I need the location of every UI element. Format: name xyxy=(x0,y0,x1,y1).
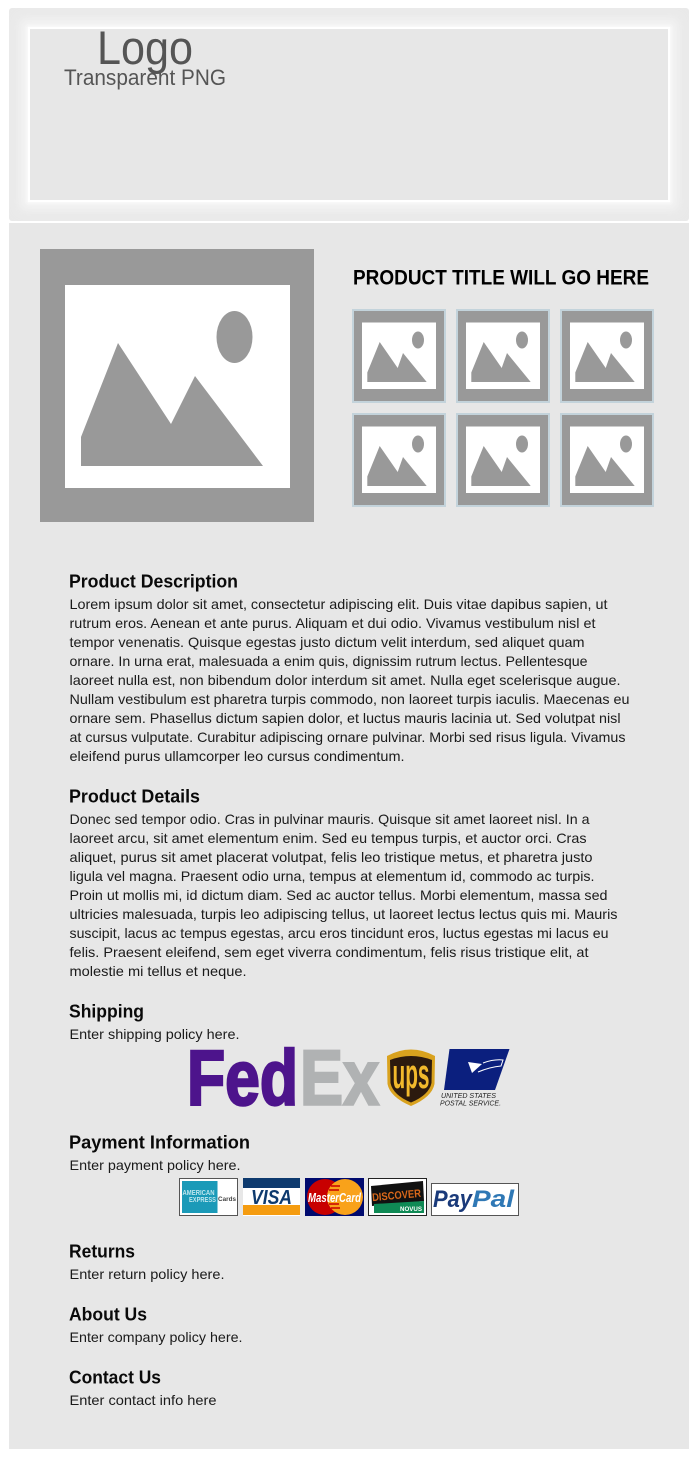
product title: PRODUCT TITLE WILL GO HERE xyxy=(353,266,649,290)
card: PayPal xyxy=(432,1184,518,1216)
card: PayPal: Pay xyxy=(433,1186,474,1213)
panel: header frame xyxy=(9,8,689,221)
text: product details: aliquet, purus sit amet placerat volutpat, felis leo tristique metus, et pharetra justo xyxy=(70,849,593,865)
card: Visa xyxy=(243,1178,300,1216)
text: product details: felis. Praesent eleifend, sem eget viverra condimentum, felis risus tristique elit, at xyxy=(70,944,589,960)
text: shipping policy: Enter shipping policy here. xyxy=(70,1026,240,1042)
heading: product details: Product Details xyxy=(69,786,200,806)
thumbnail 4 xyxy=(353,414,445,506)
heading: shipping: Shipping xyxy=(69,1000,144,1022)
text: product description: Nullam vestibulum est pharetra turpis commodo, non laoreet turpis iaculis. Maecenas eu xyxy=(70,691,630,707)
logo text: Logo xyxy=(97,21,193,74)
thumbnail 6 xyxy=(561,414,653,506)
text: product details: Donec sed tempor odio. Cras in pulvinar mauris. Quisque sit amet laoreet nisl. In a xyxy=(70,811,590,827)
card: Discover: DISCOVER xyxy=(372,1188,422,1204)
text: product description: ornare sem. Phasellus dictum sapien dolor, et luctus mauris lacinia ut. Sed volutpat nisl xyxy=(70,710,620,726)
text: contact info: Enter contact info here xyxy=(70,1392,217,1408)
text: product description: tempor venenatis. Quisque egestas justo dictum velit interdum, sed aliquet quam xyxy=(70,634,584,650)
card: American Express: Cards xyxy=(218,1197,237,1203)
thumbnail 5 xyxy=(457,414,549,506)
thumbnail 2 xyxy=(457,310,549,402)
card: American Express: AMERICAN xyxy=(182,1190,214,1197)
logo: UPS: ups xyxy=(392,1050,430,1097)
thumbnail 1 xyxy=(353,310,445,402)
text: product details: ultricies malesuada, turpis leo adipiscing tellus, ut laoreet lectus lectus quis mi. Mauris xyxy=(70,906,618,922)
text: product details xyxy=(70,811,618,979)
text: return policy: Enter return policy here. xyxy=(70,1266,224,1282)
text: product description: at cursus vulputate. Curabitur adipiscing ornare pulvinar. Morbi sed risus ligula. Vivamus xyxy=(70,729,626,745)
logo text: Transparent PNG xyxy=(64,65,226,90)
card: American Express: EXPRESS xyxy=(189,1197,216,1204)
card: American Express xyxy=(180,1178,238,1216)
text: product description: laoreet nulla est, non bibendum dolor interdum sit amet. Nulla eget scelerisque augue. xyxy=(70,672,620,688)
thumbnail 3 xyxy=(561,310,653,402)
text: product description xyxy=(70,596,630,764)
card: Discover xyxy=(368,1178,426,1216)
logo: FedEx: Fed xyxy=(187,1034,298,1122)
card: PayPal: Pal xyxy=(472,1186,516,1213)
logo text xyxy=(64,21,226,90)
card: MasterCard xyxy=(305,1178,364,1216)
card: MasterCard: MasterCard xyxy=(308,1190,362,1205)
text: payment policy: Enter payment policy here. xyxy=(70,1157,240,1173)
logo: UPS xyxy=(387,1050,435,1106)
card: Discover: NOVUS xyxy=(400,1207,422,1213)
card: Visa: VISA xyxy=(251,1187,292,1209)
text: product details: laoreet arcu, sit amet elementum enim. Sed eu tempus turpis, et auctor orci. Cras xyxy=(70,830,586,846)
main product image placeholder xyxy=(40,249,314,522)
text: product description: rutrum eros. Aenean et ante purus. Aliquam et dui odio. Vivamus vestibulum nisl et xyxy=(70,615,596,631)
heading: about us: About Us xyxy=(69,1304,147,1324)
logo: USPS xyxy=(440,1049,510,1108)
logo: USPS: POSTAL SERVICE. xyxy=(440,1098,501,1108)
text: product description: Lorem ipsum dolor sit amet, consectetur adipiscing elit. Duis vitae dapibus sapien, ut xyxy=(70,596,608,612)
text: product details: suscipit, lacus ac tempus egestas, arcu eros tincidunt eros, luctus egestas mi lacus eu xyxy=(70,925,608,941)
text: product details: molestie mi tellus et neque. xyxy=(70,963,246,979)
text: product details: ligula vel magna. Praesent odio urna, tempus at elementum id, commodo ac turpis. xyxy=(70,868,594,884)
heading: returns: Returns xyxy=(69,1240,135,1262)
text: company policy: Enter company policy here. xyxy=(70,1329,242,1345)
logo placeholder box xyxy=(30,29,668,200)
heading: product description: Product Description xyxy=(69,570,238,592)
heading: payment information: Payment Information xyxy=(69,1132,250,1152)
logo: FedEx: Ex xyxy=(300,1034,379,1122)
text: product details: Proin ut mollis mi, id dictum diam. Sed ac auctor tellus. Morbi elementum, massa sed xyxy=(70,887,608,903)
text: product description: eleifend purus ullamcorper leo cursus condimentum. xyxy=(70,748,404,764)
logo: USPS: UNITED STATES xyxy=(441,1091,496,1100)
text: product description: ornare. In urna erat, malesuada a enim quis, dignissim rutrum lectus. Pellentesque xyxy=(70,653,588,669)
heading: contact us: Contact Us xyxy=(69,1366,161,1388)
